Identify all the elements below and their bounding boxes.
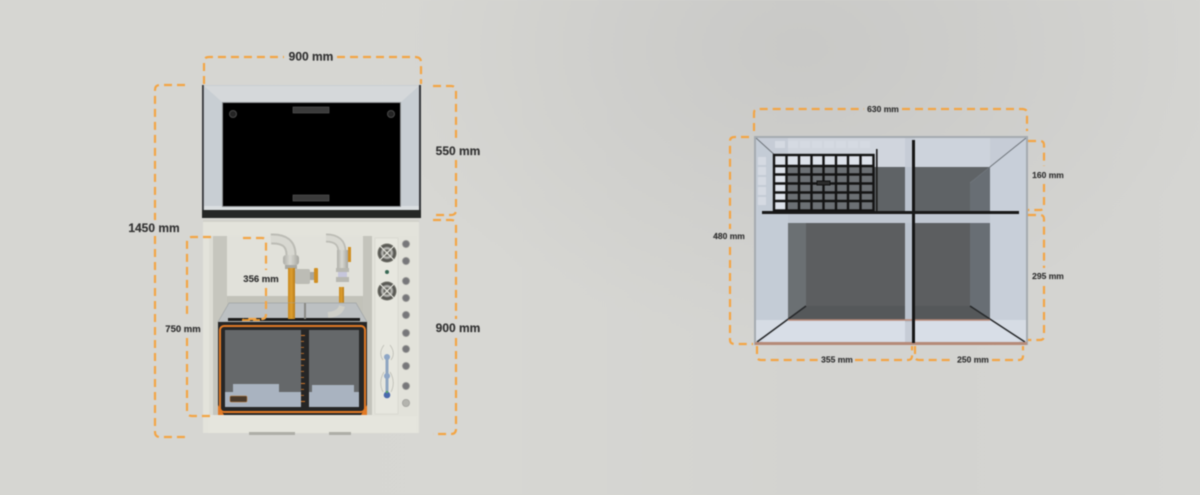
dimension: 630 mm width: 630 mm — [867, 104, 899, 114]
level scale — [301, 335, 305, 402]
dimension: 750 mm height: 750 mm — [165, 324, 201, 335]
dimension: 250 mm width: 250 mm — [957, 354, 989, 364]
dimension: 900 mm height: 900 mm — [436, 321, 480, 335]
dimension: 480 mm height — [713, 137, 753, 344]
sump logo badge — [230, 396, 247, 402]
dimension: 295 mm height: 295 mm — [1032, 271, 1064, 281]
left unit: cabinet stand — [203, 220, 419, 435]
pale cells along glass top — [758, 141, 870, 205]
cooling fans — [378, 244, 396, 300]
right control panel — [372, 236, 417, 416]
overflow combs — [293, 107, 329, 201]
dimension: 160 mm height: 160 mm — [1032, 170, 1064, 180]
dimension: 1450 mm height — [128, 85, 186, 437]
dimension: 250 mm width — [915, 346, 1023, 364]
dimension: 295 mm height — [1028, 215, 1064, 340]
left unit: display aquarium — [202, 85, 421, 218]
dimension: 750 mm height — [165, 237, 211, 416]
dimension: 550 mm height — [433, 86, 480, 215]
dimension: 1450 mm height: 1450 mm — [128, 221, 180, 235]
filter rack grid — [774, 149, 878, 211]
dimension: 900 mm width: 900 mm — [289, 50, 333, 64]
dimension: 900 mm height — [433, 220, 480, 434]
dimension: 356 mm height: 356 mm — [243, 274, 279, 285]
center baffle — [912, 140, 915, 343]
dimension: 480 mm height: 480 mm — [713, 231, 745, 241]
tank floor — [762, 320, 905, 342]
aquarium base band — [202, 210, 421, 218]
cable ports — [402, 240, 410, 407]
dimension: 550 mm height: 550 mm — [436, 144, 480, 158]
flow sensors — [381, 345, 393, 398]
tank outline — [755, 137, 1027, 344]
horizontal shelf — [762, 211, 1019, 214]
dimension: 630 mm width — [754, 104, 1027, 131]
plumbing pipes — [271, 238, 351, 319]
aquarium black back panel — [223, 103, 400, 206]
dimension: 356 mm height — [243, 238, 279, 319]
bulkheads — [230, 110, 394, 118]
dimension: 900 mm width — [204, 50, 421, 84]
dimension: 160 mm height — [1028, 141, 1064, 210]
dimension: 355 mm width: 355 mm — [821, 354, 853, 364]
sump tank — [218, 303, 367, 415]
right unit: sump glass tank — [755, 137, 1027, 345]
dimension: 355 mm width — [757, 346, 912, 364]
